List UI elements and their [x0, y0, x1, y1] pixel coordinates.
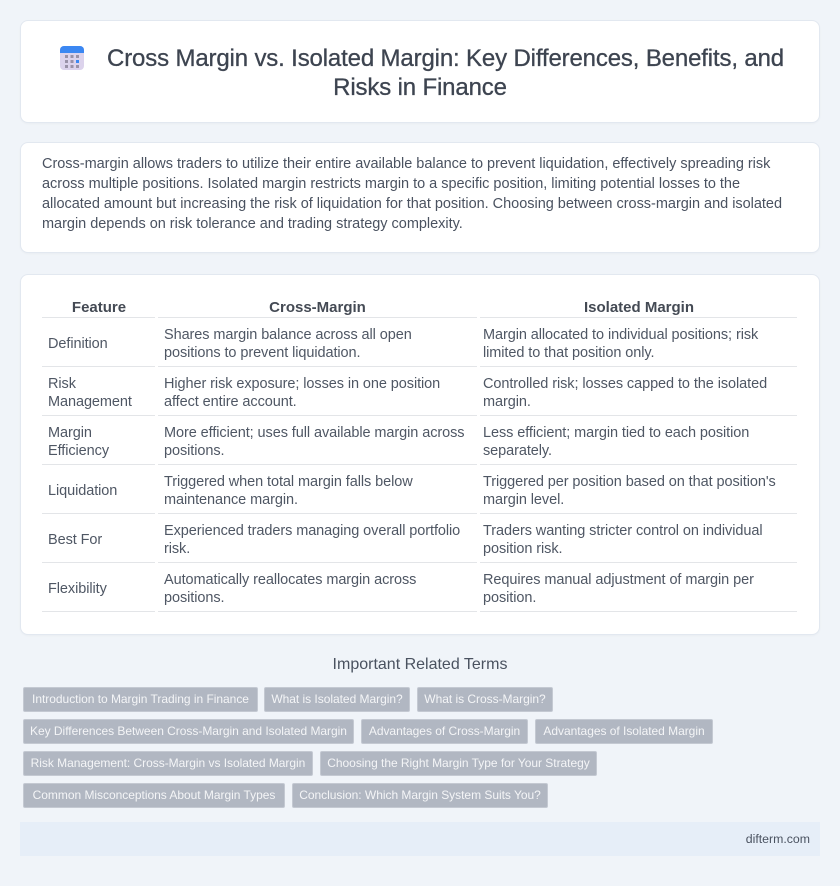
tag: Introduction to Margin Trading in Finance — [32, 692, 249, 706]
row: flexibility — [48, 572, 754, 606]
table heading row: Feature — [72, 299, 126, 316]
tag — [23, 751, 313, 776]
row: risk management: Higher risk exposure; losses in one position — [164, 376, 440, 392]
row: flexibility: Automatically reallocates margin across — [164, 572, 416, 588]
row: best for: Best For — [48, 532, 102, 548]
row: liquidation — [48, 474, 776, 508]
row: liquidation: maintenance margin. — [164, 492, 298, 508]
row: risk management: Controlled risk; losses capped to the isolated — [483, 376, 767, 392]
row: risk management: Risk — [48, 376, 76, 392]
row: margin efficiency: Margin — [48, 425, 92, 441]
title: Cross Margin vs. Isolated Margin: Key Differences, Benefits, and — [107, 45, 784, 72]
heading: related terms: Important Related Terms — [333, 656, 507, 673]
text block: introduction — [42, 156, 782, 232]
row: margin efficiency: Efficiency — [48, 443, 109, 459]
panel: introduction — [20, 142, 820, 253]
table heading row: Isolated Margin — [584, 299, 694, 316]
row: margin efficiency: Less efficient; margin tied to each position — [483, 425, 749, 441]
tag — [23, 783, 285, 808]
tag — [264, 687, 410, 712]
tag — [417, 687, 553, 712]
tag: Key Differences Between Cross-Margin and Isolated Margin — [30, 724, 347, 738]
text block: introduction: margin depends on risk tolerance and trading strategy complexity. — [42, 216, 463, 232]
tag — [535, 719, 713, 744]
tag: Choosing the Right Margin Type for Your Strategy — [327, 756, 590, 770]
row: best for: risk. — [164, 541, 190, 557]
tag: What is Isolated Margin? — [271, 692, 403, 706]
row: definition: Margin allocated to individual positions; risk — [483, 327, 758, 343]
tag — [23, 687, 258, 712]
table heading row: Cross-Margin — [269, 299, 366, 316]
row: best for: Traders wanting stricter control on individual — [483, 523, 762, 539]
row: liquidation: Liquidation — [48, 483, 117, 499]
tag: Advantages of Cross-Margin — [369, 724, 520, 738]
tag — [320, 751, 597, 776]
row: flexibility: position. — [483, 590, 536, 606]
row: margin efficiency: positions. — [164, 443, 224, 459]
tag: Advantages of Isolated Margin — [543, 724, 705, 738]
footer text: difterm.com — [746, 832, 810, 846]
row: risk management: margin. — [483, 394, 531, 410]
text block: introduction: allocated amount but increasing the risk of liquidation for that position. Choosing between cross-margin and isolated — [42, 196, 782, 212]
row: risk management: Management — [48, 394, 132, 410]
tag — [292, 783, 548, 808]
panel: header — [20, 20, 820, 123]
row: liquidation: Triggered when total margin falls below — [164, 474, 413, 490]
row: flexibility: Flexibility — [48, 581, 107, 597]
row: margin efficiency: separately. — [483, 443, 552, 459]
tag: What is Cross-Margin? — [424, 692, 546, 706]
row: best for — [48, 523, 762, 557]
tag — [361, 719, 528, 744]
row: definition: Definition — [48, 336, 108, 352]
table heading row — [72, 299, 694, 316]
row: risk management: affect entire account. — [164, 394, 297, 410]
text block: introduction: across multiple positions. Isolated margin restricts margin to a specific position, limiting potential losses to the — [42, 176, 740, 192]
row: margin efficiency: More efficient; uses full available margin across — [164, 425, 464, 441]
row: definition — [48, 327, 758, 361]
text block: introduction: Cross-margin allows traders to utilize their entire available balance to prevent liquidation, effectively spreading risk — [42, 156, 770, 172]
row: flexibility: positions. — [164, 590, 224, 606]
row: definition: positions to prevent liquidation. — [164, 345, 360, 361]
row: best for: position risk. — [483, 541, 562, 557]
row: best for: Experienced traders managing overall portfolio — [164, 523, 460, 539]
tag: Conclusion: Which Margin System Suits You? — [299, 788, 541, 802]
title — [107, 45, 784, 101]
icon: calendar — [60, 46, 84, 70]
row: definition: limited to that position only. — [483, 345, 654, 361]
panel: comparison table — [20, 274, 820, 635]
title: Risks in Finance — [333, 74, 507, 101]
row: definition: Shares margin balance across all open — [164, 327, 412, 343]
tag — [23, 719, 354, 744]
row: margin efficiency — [48, 425, 749, 459]
tag: Risk Management: Cross-Margin vs Isolated Margin — [31, 756, 305, 770]
row: liquidation: margin level. — [483, 492, 564, 508]
row: risk management — [48, 376, 767, 410]
footer bar — [20, 822, 820, 856]
related terms tags — [23, 687, 713, 808]
row: flexibility: Requires manual adjustment of margin per — [483, 572, 754, 588]
tag: Common Misconceptions About Margin Types — [33, 788, 275, 802]
row: liquidation: Triggered per position based on that position's — [483, 474, 776, 490]
